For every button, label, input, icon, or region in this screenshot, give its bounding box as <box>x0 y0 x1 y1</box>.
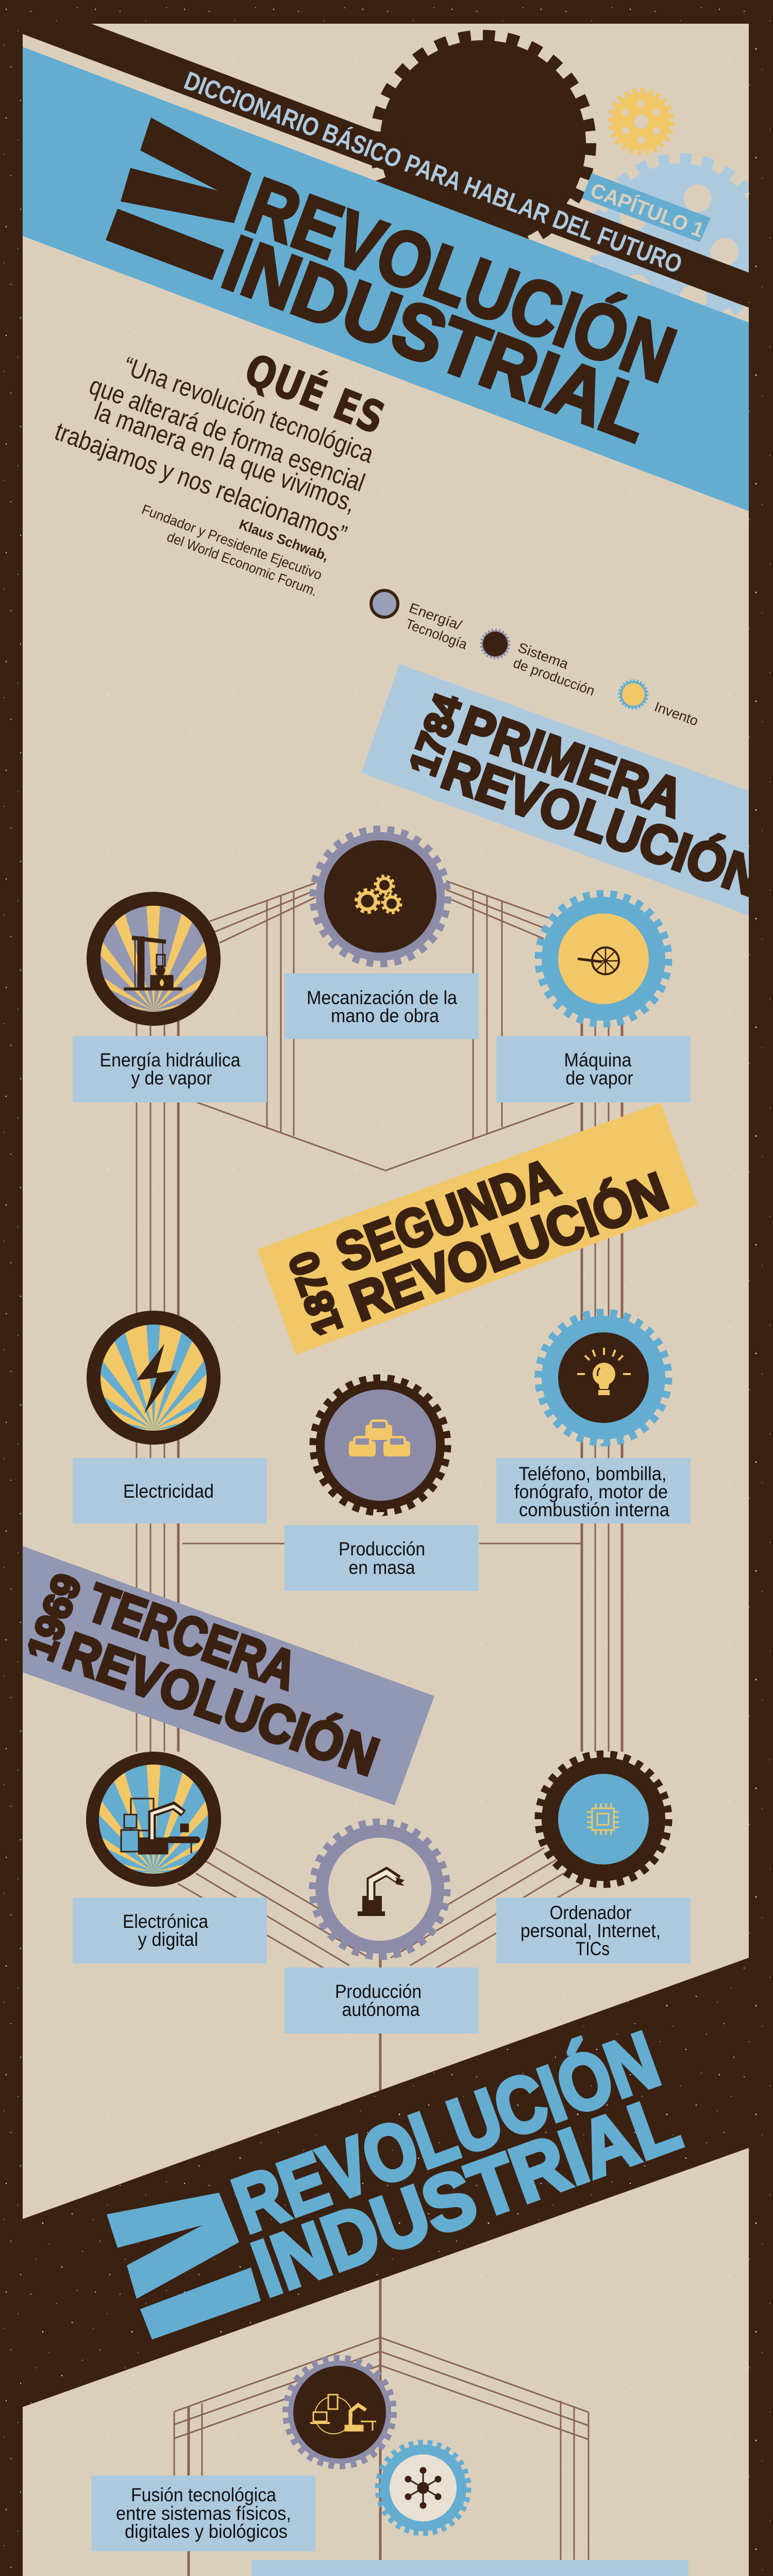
connector lines: first revolution <box>137 881 622 1752</box>
icon: big brown gear <box>377 37 589 249</box>
legend: production system: Sistema <box>516 639 571 672</box>
label: mechanization: mano de obra <box>331 1005 439 1026</box>
gear: steam engine <box>539 894 668 1024</box>
banner: primera revolución <box>361 664 769 916</box>
title in band: Revolución Industrial: REVOLUCIÓN <box>222 2015 669 2250</box>
numeral IV in band <box>107 2193 261 2340</box>
label: mechanization <box>284 973 479 1039</box>
icon: pale blue gear <box>596 160 764 328</box>
icon: node network <box>405 2467 441 2509</box>
icon: robot assembly line <box>121 1799 199 1854</box>
label: autonomous production: autónoma <box>342 1999 420 2020</box>
label: mass production <box>284 1525 479 1591</box>
label: electricity <box>73 1458 267 1523</box>
label: hydraulic energy: y de vapor <box>131 1067 212 1089</box>
chapter tag: CAPÍTULO 1 <box>587 178 707 242</box>
legend: energy: Energía/ <box>407 600 464 633</box>
icon: chip <box>587 1803 619 1835</box>
blue diagonal band <box>23 47 749 511</box>
label: personal computer, internet <box>496 1897 691 1963</box>
title in band: Revolución Industrial: INDUSTRIAL <box>242 2078 691 2313</box>
band: fourth revolution <box>23 1958 749 2407</box>
banner: tercera revolución: TERCERA <box>80 1572 305 1701</box>
banner: segunda revolución: 1870 <box>281 1246 351 1341</box>
icon: lightning bolt <box>137 1344 176 1414</box>
gear: mass production <box>313 1378 447 1512</box>
title: Revolución Industrial: REVOLUCIÓN <box>236 161 686 399</box>
quote attribution: Fundador y Presidente Ejecutivo <box>140 502 324 583</box>
label: hydraulic energy <box>73 1036 267 1103</box>
brown diagonal band <box>23 24 749 308</box>
label: technological fusion: Fusión tecnológica <box>131 2484 276 2505</box>
icon: robotic arm <box>358 1872 403 1916</box>
label: electronics <box>73 1897 267 1963</box>
banner: primera revolución: 1784 <box>401 688 470 781</box>
icon: cars <box>349 1419 410 1456</box>
gear: autonomous production <box>313 1822 447 1956</box>
label: electronics: y digital <box>138 1929 198 1950</box>
label: steam engine: Máquina <box>564 1049 632 1071</box>
gear: telephone and bulb <box>539 1313 668 1443</box>
quote: “Una revolución tecnológica <box>120 351 378 469</box>
icon: yellow gear <box>611 91 671 152</box>
gear: personal computer <box>539 1754 668 1884</box>
label: steam engine <box>496 1036 691 1103</box>
gear: cyber-physical fusion <box>286 2359 393 2466</box>
legend: energy: Tecnología <box>404 616 470 653</box>
label: technologies list <box>251 2560 688 2576</box>
legend: energy <box>371 590 470 653</box>
legend: invention: Invento <box>652 699 700 729</box>
label: technological fusion <box>91 2476 315 2551</box>
label: telephone, bulb, phonograph, engine <box>496 1458 691 1523</box>
gear: electricity <box>87 1311 221 1489</box>
title numeral IV <box>106 117 251 280</box>
legend: production system: de producción <box>511 655 597 699</box>
banner: segunda revolución: REVOLUCIÓN <box>343 1161 675 1333</box>
label: personal computer, internet: Ordenador <box>549 1902 632 1923</box>
label: autonomous production: Producción <box>335 1981 422 2002</box>
label: telephone, bulb, phonograph, engine: Teléfono, bombilla, <box>518 1463 667 1484</box>
banner: tercera revolución <box>19 1546 434 1805</box>
quote: la manera en la que vivimos, <box>91 397 360 518</box>
label: personal computer, internet: personal, Internet, <box>520 1920 661 1941</box>
icon: three gears <box>356 876 401 913</box>
quote attribution: del World Economic Forum. <box>165 529 320 599</box>
banner: tercera revolución: 1969 <box>19 1568 90 1666</box>
banner: tercera revolución: REVOLUCIÓN <box>56 1621 386 1787</box>
label: mass production: en masa <box>348 1557 415 1578</box>
label: mechanization: Mecanización de la <box>307 987 457 1008</box>
label: hydraulic energy: Energía hidráulica <box>100 1049 241 1071</box>
connector lines: fourth revolution house shapes <box>174 2337 589 2576</box>
label: electricity: Electricidad <box>123 1481 214 1502</box>
label: mass production: Producción <box>339 1538 425 1560</box>
label: steam engine: de vapor <box>566 1067 633 1089</box>
gear: networks <box>378 2443 468 2533</box>
banner: segunda revolución <box>257 1103 698 1355</box>
banner: segunda revolución: SEGUNDA <box>329 1147 566 1284</box>
icon: connected factory <box>310 2395 376 2434</box>
quote: trabajamos y nos relacionamos” <box>51 417 350 549</box>
gear: hydraulic and steam energy <box>87 892 221 1070</box>
heading: qué es: QUÉ ES <box>238 344 392 444</box>
legend: production system <box>481 630 597 699</box>
label: technological fusion: digitales y biológicos <box>125 2521 288 2542</box>
label: personal computer, internet: TICs <box>576 1938 610 1959</box>
quote attribution: Klaus Schwab, <box>237 517 331 564</box>
connector lines: third revolution chevron <box>178 1848 582 2576</box>
quote: que alterará de forma esencial <box>86 371 368 497</box>
gear: mechanization <box>313 829 447 963</box>
label: technological fusion: entre sistemas físicos, <box>116 2503 291 2524</box>
banner: primera revolución: PRIMERA <box>452 695 691 829</box>
label: autonomous production <box>284 1968 479 2033</box>
icon: light bulb <box>577 1348 631 1395</box>
label: electronics: Electrónica <box>123 1911 208 1932</box>
gear: electronics <box>86 1752 221 1933</box>
title: Revolución Industrial: INDUSTRIAL <box>212 219 661 459</box>
label: telephone, bulb, phonograph, engine: combustión interna <box>519 1499 669 1520</box>
label: telephone, bulb, phonograph, engine: fonógrafo, motor de <box>514 1481 668 1502</box>
icon: pump jack <box>124 937 182 990</box>
legend: invention <box>619 681 700 729</box>
icon: steam wheel <box>578 947 619 974</box>
quote <box>55 357 372 540</box>
